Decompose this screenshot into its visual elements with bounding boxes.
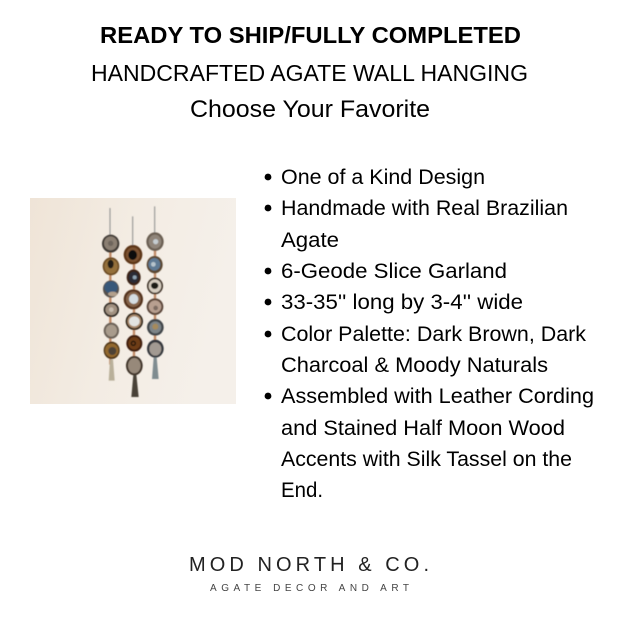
list text [281,166,594,502]
feature list [264,166,594,502]
garland: middle [124,245,143,397]
list text: 33-35'' long by 3-4'' wide [281,291,523,314]
brand logo [189,554,429,594]
list text: Handmade with Real Brazilian [281,197,568,220]
garlands [102,206,164,397]
hanging wires [110,206,155,245]
list text: Color Palette: Dark Brown, Dark [281,323,586,346]
garland: right [146,232,164,379]
list text: Accents with Silk Tassel on the [281,448,572,471]
list text: Agate [281,229,339,252]
subtitle: handcrafted agate wall hanging: HANDCRAFTED AGATE WALL HANGING [91,60,528,86]
garland: left [102,235,120,381]
bullet markers [265,174,271,399]
list text: Assembled with Leather Cording [281,385,594,408]
brand name: MOD NORTH & CO. [189,554,429,576]
list text: End. [281,479,323,502]
heading block [91,22,528,123]
leather cord links [110,246,155,365]
list text: 6-Geode Slice Garland [281,260,507,283]
brand tagline: AGATE DECOR AND ART [210,583,409,594]
product photo: three agate garlands on a cream wall [30,198,236,404]
list text: One of a Kind Design [281,166,485,189]
wall background [30,198,236,404]
title: ready to ship: READY TO SHIP/FULLY COMPLETED [100,22,521,48]
list text: Charcoal & Moody Naturals [281,354,548,377]
tagline: choose your favorite: Choose Your Favorite [190,96,430,123]
list text: and Stained Half Moon Wood [281,417,565,440]
